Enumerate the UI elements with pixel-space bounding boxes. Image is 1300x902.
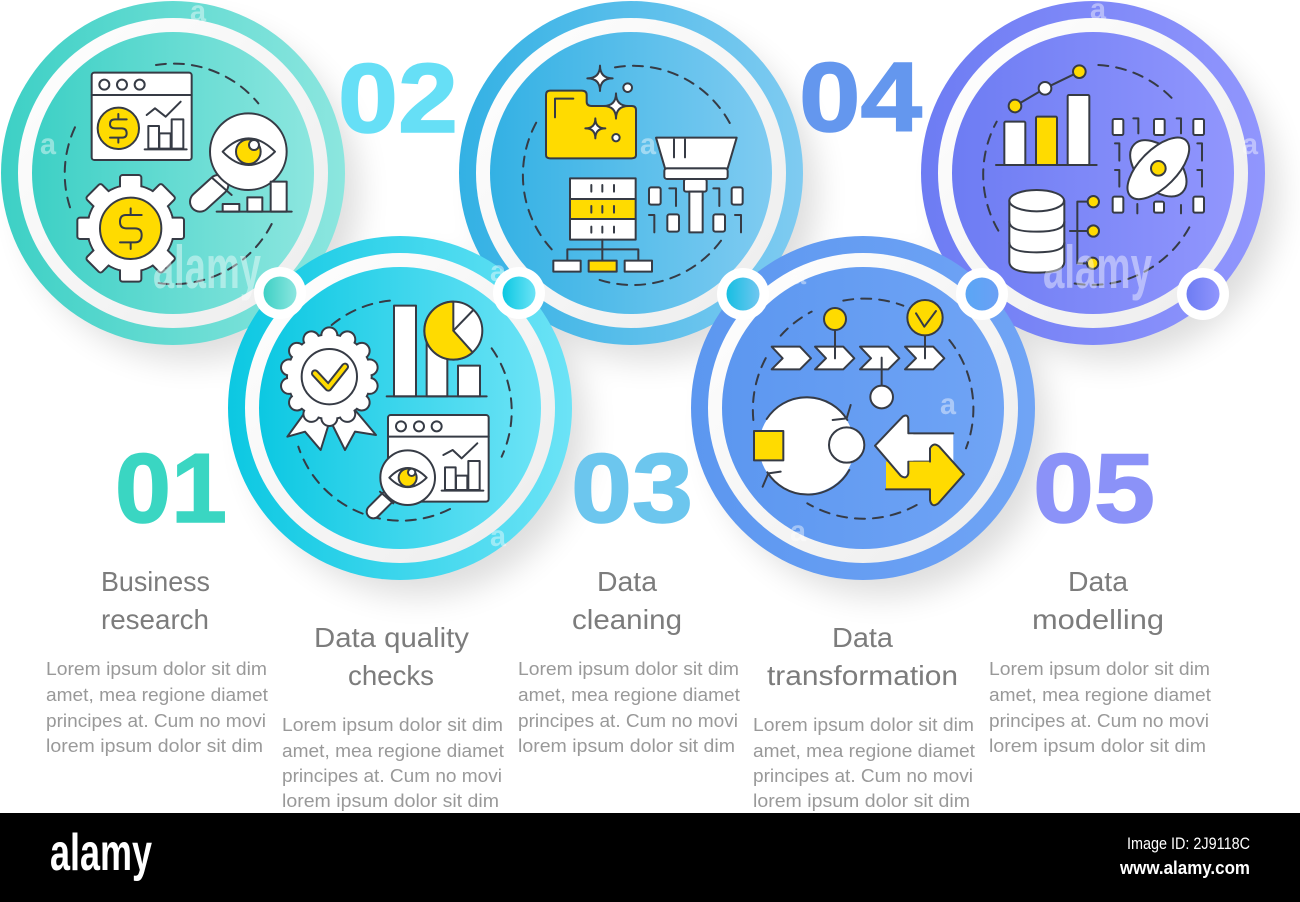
circle 1 base <box>1 1 345 345</box>
number 01: 01 <box>115 433 227 543</box>
circle 3 base <box>459 1 803 345</box>
watermarks: a <box>490 520 506 553</box>
heading: data modelling: Data <box>1068 566 1128 597</box>
body text 1: amet, mea regione diamet <box>46 684 268 705</box>
body text 5: Lorem ipsum dolor sit dim <box>989 658 1210 679</box>
body text 2: principes at. Cum no movi <box>282 765 502 786</box>
icon: data quality checks <box>279 301 512 521</box>
heading: business research: Business <box>101 566 210 597</box>
heading: data transformation: transformation <box>767 660 958 691</box>
watermarks: alamy <box>153 234 261 301</box>
watermarks: a <box>940 388 956 421</box>
body text 4: lorem ipsum dolor sit dim <box>753 790 970 811</box>
icon: data modelling <box>983 65 1204 285</box>
watermarks: a <box>490 255 506 288</box>
heading: business research: research <box>101 604 209 635</box>
heading: data modelling <box>1032 566 1164 635</box>
heading: data quality checks: checks <box>348 660 434 691</box>
icon: business research <box>65 64 292 284</box>
body text 4 <box>753 714 975 811</box>
body text 2 <box>282 714 504 811</box>
heading: business research <box>101 566 210 635</box>
watermarks: a <box>790 258 806 291</box>
body text 3: lorem ipsum dolor sit dim <box>518 735 735 756</box>
circle 2 base <box>228 236 572 580</box>
watermarks <box>40 0 1258 553</box>
number 03: 03 <box>571 433 693 543</box>
body text 4: amet, mea regione diamet <box>753 740 975 761</box>
heading: data cleaning: Data <box>597 566 657 597</box>
body text 4: principes at. Cum no movi <box>753 765 973 786</box>
heading: data quality checks: Data quality <box>314 622 469 653</box>
heading: data cleaning: cleaning <box>572 604 682 635</box>
body text 3: Lorem ipsum dolor sit dim <box>518 658 739 679</box>
footer logo: alamy <box>50 824 152 882</box>
body text 2: amet, mea regione diamet <box>282 740 504 761</box>
circle 5 base <box>921 1 1265 345</box>
body text 1: Lorem ipsum dolor sit dim <box>46 658 267 679</box>
circle drop shadows <box>23 25 1279 596</box>
number 02: 02 <box>338 43 458 153</box>
body text 4: Lorem ipsum dolor sit dim <box>753 714 974 735</box>
body text 1: lorem ipsum dolor sit dim <box>46 735 263 756</box>
number 05: 05 <box>1033 433 1155 543</box>
body text 3 <box>518 658 740 756</box>
watermarks: a <box>640 128 656 161</box>
body text 5: lorem ipsum dolor sit dim <box>989 735 1206 756</box>
body text 5: amet, mea regione diamet <box>989 684 1211 705</box>
heading: data cleaning <box>572 566 682 635</box>
heading: data quality checks <box>314 622 469 691</box>
circle 4 base <box>691 236 1035 580</box>
heading: data modelling: modelling <box>1032 604 1164 635</box>
connector nodes <box>254 267 1229 320</box>
body text 3: amet, mea regione diamet <box>518 684 740 705</box>
icon: data transformation <box>753 299 973 519</box>
body text 3: principes at. Cum no movi <box>518 710 738 731</box>
body text 2: lorem ipsum dolor sit dim <box>282 790 499 811</box>
image id: Image ID: 2J9118C <box>1127 834 1250 853</box>
heading: data transformation <box>767 622 958 691</box>
number 04: 04 <box>799 42 922 152</box>
body text 5: principes at. Cum no movi <box>989 710 1209 731</box>
body text 1 <box>46 658 268 756</box>
icon: data cleaning <box>523 66 743 285</box>
body text 2: Lorem ipsum dolor sit dim <box>282 714 503 735</box>
watermarks: alamy <box>1043 234 1152 301</box>
body text 5 <box>989 658 1211 756</box>
watermarks: a <box>1242 128 1258 161</box>
body text 1: principes at. Cum no movi <box>46 710 266 731</box>
watermarks: a <box>40 128 56 161</box>
watermarks: a <box>790 515 806 548</box>
website: www.alamy.com <box>1119 858 1250 878</box>
heading: data transformation: Data <box>832 622 893 653</box>
footer bar <box>0 813 1300 902</box>
